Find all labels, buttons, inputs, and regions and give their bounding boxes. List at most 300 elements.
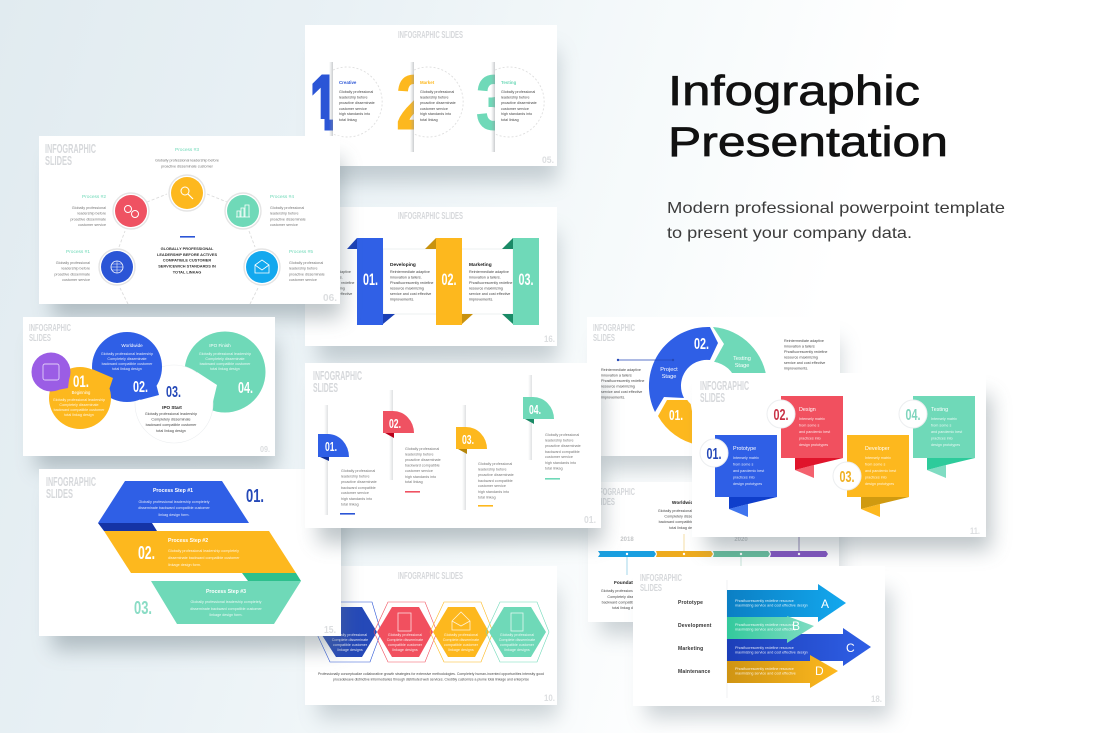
card 01: Prototype (733, 446, 756, 452)
segment testing stage (713, 327, 767, 382)
hexagon blue: Complete disseminate (332, 638, 368, 642)
column 2: Market (420, 80, 435, 85)
hexagon red: compatible customer (388, 643, 423, 647)
bubble 01: Beginning (72, 390, 91, 395)
hexagon blue: compatible customer (333, 643, 368, 647)
foundation text: backward compatible customer (602, 600, 653, 604)
slide number 10: 10. (544, 693, 555, 703)
pie slide heading: INFOGRAPHIC (593, 323, 635, 334)
column 3: proactive disseminate (501, 101, 537, 105)
marketing text: Marketing (469, 262, 492, 268)
column 1: total linkag (339, 118, 357, 122)
text 01: backward compatible (341, 486, 376, 490)
hexagon yellow: Complete disseminate (443, 638, 479, 642)
card 01: design prototypes (733, 482, 762, 486)
divider (726, 580, 728, 698)
card 02: Intensely matrix (799, 417, 825, 421)
connectors (627, 534, 799, 575)
card 04: practices into (931, 436, 953, 440)
slide number 18: 18. (871, 694, 882, 704)
icon: envelope (452, 612, 470, 630)
main title (668, 67, 948, 165)
segment 01 yellow: 01. (669, 407, 683, 424)
left paragraph partly hidden (311, 270, 354, 296)
centre statement: LEADERSHIP BEFORE ACTIVES (157, 252, 217, 257)
slide 11 heading: SLIDES (700, 391, 725, 405)
card 02: Design (799, 407, 816, 413)
timeline bar (598, 551, 828, 557)
segment testing stage: Stage (735, 363, 749, 369)
foundation text: Completely disseminate (607, 595, 647, 599)
hexagon red: Complete disseminate (387, 638, 423, 642)
step 2 (104, 531, 296, 573)
left paragraph partly hidden: resource maximizing (311, 286, 345, 290)
foundation text (601, 580, 653, 610)
column 3: leadership before (501, 96, 530, 100)
process 2 label: Process #2 (82, 194, 106, 200)
text 03: customer service (478, 484, 506, 488)
worldwide text (658, 500, 710, 530)
bubble 03: 03. (166, 384, 181, 401)
purple icon bubble (32, 352, 70, 392)
text 02: backward compatible (405, 464, 440, 468)
right paragraph: service and cost effective (784, 361, 825, 365)
bubble 03: IPO Start (162, 405, 182, 410)
text 02: leadership before (405, 452, 434, 456)
card 01: and pandemic best (733, 469, 764, 473)
dashed connectors (119, 194, 258, 304)
icon: page (511, 613, 523, 631)
bubble 03: backward compatible customer (146, 423, 197, 427)
card 04: and pandemic best (931, 430, 962, 434)
arrow D: maximizing service and cost effective (735, 672, 796, 676)
card 04: Testing (931, 407, 948, 413)
process 4 label: customer service (270, 223, 298, 227)
row labels (678, 600, 712, 675)
column 3: Globally professional (501, 90, 535, 94)
card 04: 04. (906, 407, 920, 424)
column 2: high standards into (420, 112, 451, 116)
developing text: service and cost effective (390, 292, 431, 296)
arrow C: C (846, 641, 855, 655)
flag 04: 04. (529, 402, 541, 417)
column 1: Creative (339, 80, 357, 85)
hexagon red (374, 602, 437, 662)
arrow B: maximizing service and cost effective (735, 628, 796, 632)
left paragraph: Phosfluorescently redefine (601, 379, 644, 383)
marketing text (469, 262, 512, 302)
slide number 05: 05. (542, 155, 554, 165)
left paragraph: Reintermediate adaptive (601, 368, 641, 372)
circle node red with gears (113, 193, 149, 229)
right paragraph: improvements. (784, 366, 808, 370)
bubble 01: total linkag design (64, 413, 94, 417)
card 03: 03. (840, 469, 854, 486)
process 1 label: leadership before (62, 266, 90, 270)
developing text: Reintermediate adaptive (390, 270, 430, 274)
process 3 label (155, 147, 219, 168)
text 02 (405, 447, 441, 493)
step 2: disseminate backward compatible customer (168, 556, 240, 560)
bubble 03: total linkag design (156, 429, 186, 433)
slide 18: arrows (633, 566, 891, 718)
slide number 09: 09. (260, 445, 270, 454)
bubble 04: Completely disseminate (205, 357, 245, 361)
flag 03 (456, 427, 487, 454)
card 02: practices into (799, 436, 821, 440)
right paragraph: Reintermediate adaptive (784, 339, 824, 343)
row labels: Maintenance (678, 669, 711, 675)
text 01 (340, 469, 377, 515)
column 1: customer service (339, 107, 367, 111)
hexagon blue: linkage designs (337, 648, 363, 652)
text 03: total linkag (478, 496, 496, 500)
slide number 16: 16. (544, 334, 555, 344)
slide 09 heading: SLIDES (29, 333, 51, 344)
segment testing stage: Testing (733, 356, 751, 362)
process 5 label: proactive disseminate (289, 272, 325, 276)
left paragraph partly hidden: service and cost effective (311, 292, 352, 296)
slide number 06: 06. (323, 293, 337, 304)
hexagon yellow: Globally professional (444, 633, 478, 637)
bubble 01: backward compatible customer (54, 408, 105, 412)
year labels: 2020 (734, 537, 748, 543)
slide 05 heading: INFOGRAPHIC SLIDES (398, 30, 463, 41)
marketing text: Phosfluorescently redefine (469, 281, 512, 285)
developing text (390, 262, 433, 302)
text 04: total linkag (545, 466, 563, 470)
icon: document (398, 613, 411, 631)
timeline heading (593, 487, 635, 508)
right paragraph: Phosfluorescently redefine (784, 350, 827, 354)
text 01: Globally professional (341, 469, 375, 473)
text 02: Globally professional (405, 447, 439, 451)
worldwide text: total linkag design (669, 526, 699, 530)
worldwide text: Completely disseminate (664, 514, 704, 518)
ribbon 01 (347, 238, 395, 325)
text 04: customer service (545, 455, 573, 459)
column 3: Testing (501, 80, 517, 85)
step 3: Process Step #3 (206, 589, 246, 595)
text 02: proactive disseminate (405, 458, 441, 462)
process 4 label: Globally professional (270, 206, 304, 210)
slide 15 heading: SLIDES (46, 487, 73, 501)
segment project stage: 02. (694, 336, 709, 353)
process 3 label: Globally professional leadership before (155, 158, 219, 162)
column 3: total linkag (501, 118, 519, 122)
fold blue (98, 523, 157, 531)
column 1 (329, 60, 393, 155)
column 3: customer service (501, 107, 529, 111)
card 01 (700, 435, 777, 517)
slide 05: numbered columns (305, 25, 558, 182)
foot mask for number 1 (305, 119, 324, 132)
hexagon red: linkage designs (392, 648, 418, 652)
process 1 label: proactive disseminate (54, 272, 90, 276)
flag 02: 02. (389, 416, 401, 431)
step 2: Globally professional leadership completely (168, 549, 239, 553)
marketing text: improvements. (469, 298, 493, 302)
bubble 04: Globally professional leadership (199, 352, 251, 356)
process 2 label: leadership before (78, 212, 106, 216)
slide 01 heading (313, 369, 362, 395)
main title: Presentation (668, 118, 948, 165)
timeline heading: INFOGRAPHIC (593, 487, 635, 498)
marketing text: service and cost effective (469, 292, 510, 296)
card 03: practices into (865, 476, 887, 480)
centre bar (180, 236, 195, 238)
step 3: linkage design form. (209, 613, 243, 617)
text 02: high standards into (405, 475, 436, 479)
centre statement: GLOBALLY PROFESSIONAL (161, 246, 214, 251)
process 4 label: Process #4 (270, 194, 294, 200)
card 04: design prototypes (931, 443, 960, 447)
hexagon teal: linkage designs (504, 648, 530, 652)
text 03: proactive disseminate (478, 473, 514, 477)
row labels: Development (678, 623, 712, 629)
arrow B: Phosfluorescently redefine resource (735, 623, 794, 627)
text 03: Globally professional (478, 462, 512, 466)
flag 01 (318, 434, 349, 461)
bubble 03: Completely disseminate (151, 418, 191, 422)
bubble 02: Completely disseminate (107, 357, 147, 361)
subtitle: Modern professional powerpoint template (667, 200, 1005, 217)
slide 06 heading: SLIDES (45, 154, 72, 168)
text 03 (478, 462, 514, 507)
bubble 01: Completely disseminate (59, 403, 99, 407)
text 03: leadership before (478, 468, 506, 472)
flag 03: 03. (462, 432, 474, 447)
foundation text: Foundation (614, 580, 640, 586)
text 04: leadership before (545, 438, 574, 442)
arrow A: Phosfluorescently redefine resource (735, 599, 794, 603)
column edge shadows (324, 375, 532, 515)
slide number 15: 15. (324, 625, 336, 636)
centre statement: SERVICEWICH STANDARDS IN (158, 264, 216, 268)
step 2: Process Step #2 (168, 538, 208, 544)
slide 09 heading: INFOGRAPHIC (29, 323, 71, 334)
slide 10 footer text: Professionally conceptualize collaborative growth strategies for extensive methodologies. Completely human-incented opportunities intensity good (318, 672, 544, 676)
text 04: backward compatible (545, 450, 580, 454)
worldwide text: Globally professional leadership (658, 509, 710, 513)
arrow D (727, 655, 838, 688)
bubble 01: Globally professional leadership (53, 398, 105, 402)
card 01: from some s (733, 462, 753, 466)
slide 18 heading (640, 573, 682, 594)
slide 10: hexagons (305, 566, 558, 718)
flag 01: 01. (325, 439, 337, 454)
bubble 03: Globally professional leadership (145, 412, 197, 416)
subtitle: to present your company data. (667, 225, 912, 242)
slide 10 heading: INFOGRAPHIC SLIDES (398, 571, 463, 582)
subtitle (667, 200, 1005, 242)
slide 01 heading: INFOGRAPHIC (313, 369, 362, 383)
process 3 label: proactive disseminate customer (161, 164, 214, 168)
ribbon 03 (502, 238, 539, 325)
bubble 02: 02. (133, 379, 148, 396)
process 5 label (289, 249, 325, 282)
column 1: high standards into (339, 112, 370, 116)
text 02: total linkag (405, 480, 423, 484)
process 5 label: Globally professional (289, 261, 323, 265)
text 03: high standards into (478, 490, 509, 494)
slide 01 heading: SLIDES (313, 381, 338, 395)
hexagon teal: Complete disseminate (499, 638, 535, 642)
column 2: Globally professional (420, 90, 454, 94)
circle node blue with globe (99, 249, 135, 285)
card 02: from some s (799, 424, 819, 428)
main title: Infographic (668, 67, 920, 114)
slide 09 heading (29, 323, 71, 344)
centre statement (157, 246, 217, 274)
text 04: Globally professional (545, 433, 579, 437)
left paragraph (601, 368, 644, 400)
hexagon yellow: compatible customer (444, 643, 479, 647)
arrow B: B (792, 619, 800, 633)
bubble 02: backward compatible customer (102, 362, 153, 366)
slide 16: ribbons (305, 207, 558, 362)
pointer line (617, 359, 674, 361)
card 03: from some s (865, 462, 885, 466)
column 3 (491, 60, 555, 155)
circle node light blue with envelope (244, 249, 280, 285)
centre circle (683, 361, 733, 411)
pie slide heading: SLIDES (593, 333, 615, 344)
card 02: 02. (774, 407, 788, 424)
developing text: resource maximizing (390, 286, 424, 290)
bubble 04: 04. (238, 380, 253, 397)
left paragraph partly hidden: innovation a tailers. (311, 276, 343, 280)
slide: circular stage chart (587, 317, 840, 470)
process 1 label: customer service (62, 278, 90, 282)
bubble 04: total linkag design (210, 367, 240, 371)
step 2: linkage design form. (168, 563, 201, 567)
circle node green with chart (225, 193, 261, 229)
slide number 01: 01. (584, 515, 596, 526)
ribbon 02: 02. (442, 270, 456, 289)
card 04: from some s (931, 424, 951, 428)
developing text: improvements. (390, 298, 414, 302)
bubble 02: total linkag design (112, 367, 142, 371)
process 4 label: leadership before (270, 212, 298, 216)
right paragraph (784, 339, 827, 370)
slide 06 heading: INFOGRAPHIC (45, 142, 96, 156)
developing text: Phosfluorescently redefine (390, 281, 433, 285)
slide 11 heading: INFOGRAPHIC (700, 379, 749, 393)
card 03: and pandemic best (865, 469, 896, 473)
process 1 label (54, 249, 90, 282)
card 03 (833, 435, 909, 517)
column 2: proactive disseminate (420, 101, 456, 105)
marketing text: Reintermediate adaptive (469, 270, 509, 274)
column 1: Globally professional (339, 90, 373, 94)
white ribbon band (383, 249, 513, 314)
step 3: Globally professional leadership completely (191, 600, 262, 604)
foundation text: Globally professional leadership (601, 589, 653, 593)
arrow D: Phosfluorescently redefine resource (735, 667, 794, 671)
text 04: high standards into (545, 461, 576, 465)
right paragraph: resource maximizing (784, 356, 818, 360)
circle node yellow with magnifier (169, 175, 205, 211)
arrow B (727, 616, 814, 643)
bubble 03 (135, 365, 217, 443)
bubble 04 (184, 332, 266, 412)
card 04: Intensely matrix (931, 417, 957, 421)
slide 18 heading: SLIDES (640, 583, 662, 594)
hexagon teal: Globally professional (500, 633, 534, 637)
year labels (620, 537, 748, 543)
slide 01: stepped flags (305, 363, 603, 543)
flag 04 (523, 397, 554, 424)
arrow D: D (815, 664, 824, 678)
centre statement: TOTAL LINKAG (173, 270, 201, 274)
text 01: proactive disseminate (341, 480, 377, 484)
left paragraph: resource maximizing (601, 384, 635, 388)
bubble 02 (92, 332, 162, 402)
worldwide text: Worldwide (672, 500, 696, 506)
arrow A: A (821, 597, 829, 611)
card 01: Intensely matrix (733, 456, 759, 460)
process 5 label: Process #5 (289, 249, 313, 255)
step 1 (98, 481, 249, 523)
slide 15: process steps (39, 469, 342, 650)
text 01: total linkag (341, 502, 359, 506)
process 5 label: customer service (289, 278, 317, 282)
slide 06 heading (45, 142, 96, 168)
right paragraph: innovation a tailers (784, 344, 815, 348)
arrow C: Phosfluorescently redefine resource (735, 646, 794, 650)
number 3: 3 (476, 60, 512, 146)
marketing text: innovation a tailers. (469, 276, 501, 280)
foundation text: total linkag design (612, 606, 642, 610)
arrow C (727, 628, 871, 666)
bubble 02: Globally professional leadership (101, 352, 153, 356)
hexagon blue (316, 602, 381, 662)
process 2 label: proactive disseminate (70, 218, 106, 222)
slide 15 heading (46, 475, 96, 501)
step 2: 02. (138, 543, 155, 563)
ribbon 01: 01. (363, 270, 378, 289)
arrow C: maximizing service and cost effective design (735, 650, 808, 654)
row labels: Prototype (678, 600, 703, 606)
process 3 label: Process #3 (175, 147, 199, 153)
row labels: Marketing (678, 646, 703, 652)
slide: timeline (588, 482, 840, 635)
card 04 (899, 396, 975, 478)
text 04 (545, 433, 581, 480)
hexagon red: Globally professional (388, 633, 422, 637)
number 2: 2 (396, 60, 432, 146)
bubble 02: Worldwide (121, 343, 143, 348)
text 04: proactive disseminate (545, 444, 581, 448)
column 3: high standards into (501, 112, 532, 116)
slide 15 heading: INFOGRAPHIC (46, 475, 96, 489)
card 01: practices into (733, 476, 755, 480)
text 01: leadership before (341, 474, 370, 478)
left paragraph: service and cost effective (601, 390, 642, 394)
bubble 01: 01. (73, 372, 89, 391)
process 4 label: proactive disseminate (270, 218, 306, 222)
slide number 11: 11. (970, 526, 980, 536)
flag 02 (383, 411, 414, 438)
slide 10 footer text (318, 672, 544, 682)
hexagon yellow: linkage designs (448, 648, 474, 652)
card 02: and pandemic best (799, 430, 830, 434)
text 03: backward compatible (478, 479, 513, 483)
number 01: 01. (246, 486, 264, 506)
process 1 label: Process #1 (66, 249, 90, 255)
process 4 label (270, 194, 306, 227)
